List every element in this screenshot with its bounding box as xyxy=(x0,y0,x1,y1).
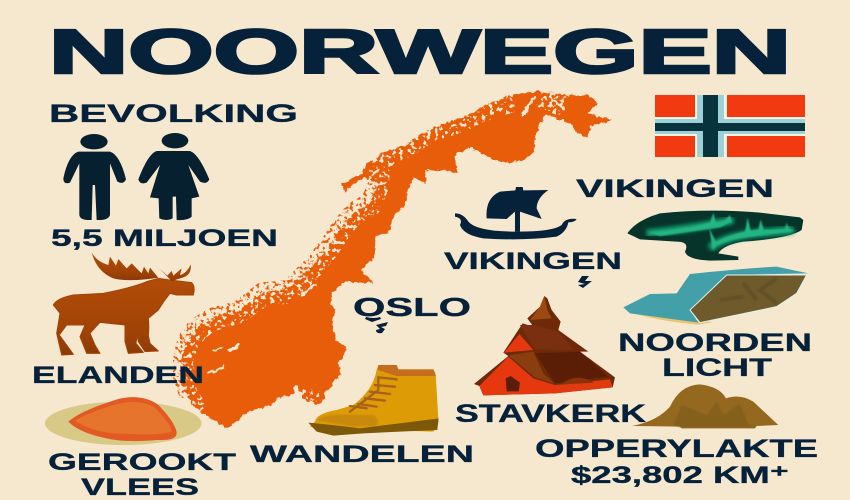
population value: 5,5 MILJOEN xyxy=(51,225,278,252)
label: stavkerk: STAVKERK xyxy=(455,400,646,428)
icon: northern lights xyxy=(627,211,803,261)
coast speckles xyxy=(183,97,563,413)
icon: mountains xyxy=(632,384,778,428)
flag of Norway xyxy=(655,95,805,157)
icon: hiking boot xyxy=(308,365,439,436)
fjords xyxy=(208,97,563,400)
label: vikingen top: VIKINGEN xyxy=(576,175,774,203)
icon: stave church xyxy=(474,296,615,395)
coast islands xyxy=(180,180,377,397)
label: gerookt vlees: GEROOKT xyxy=(48,449,237,476)
label: elanden: ELANDEN xyxy=(32,362,204,389)
label: wandelen: WANDELEN xyxy=(250,441,474,468)
icon: fjord cliff xyxy=(623,267,808,325)
label: oppervlakte xyxy=(535,435,818,489)
label: noorden licht: NOORDEN xyxy=(618,329,812,357)
icon: oslo marker glyph xyxy=(365,317,388,333)
icon: vikingen marker glyph xyxy=(578,276,592,288)
label: noorden licht xyxy=(618,329,812,382)
icon: man and woman xyxy=(63,133,209,220)
label: oppervlakte: OPPERYLAKTE xyxy=(535,435,818,463)
label: vikingen: VIKINGEN xyxy=(444,248,622,275)
label: noorden licht: LICHT xyxy=(662,354,772,382)
icon: smoked meat on plate xyxy=(45,397,202,445)
label: oslo: OSLO xyxy=(353,292,471,322)
map of Norway xyxy=(180,92,610,427)
title: NOORWEGEN xyxy=(49,18,791,87)
label: oppervlakte: $23,802 KM⁺ xyxy=(571,462,789,489)
heading: bevolking: BEVOLKING xyxy=(49,100,298,128)
icon: viking ship xyxy=(455,187,577,239)
icon: moose xyxy=(53,252,194,355)
label: gerookt vlees xyxy=(48,449,237,500)
